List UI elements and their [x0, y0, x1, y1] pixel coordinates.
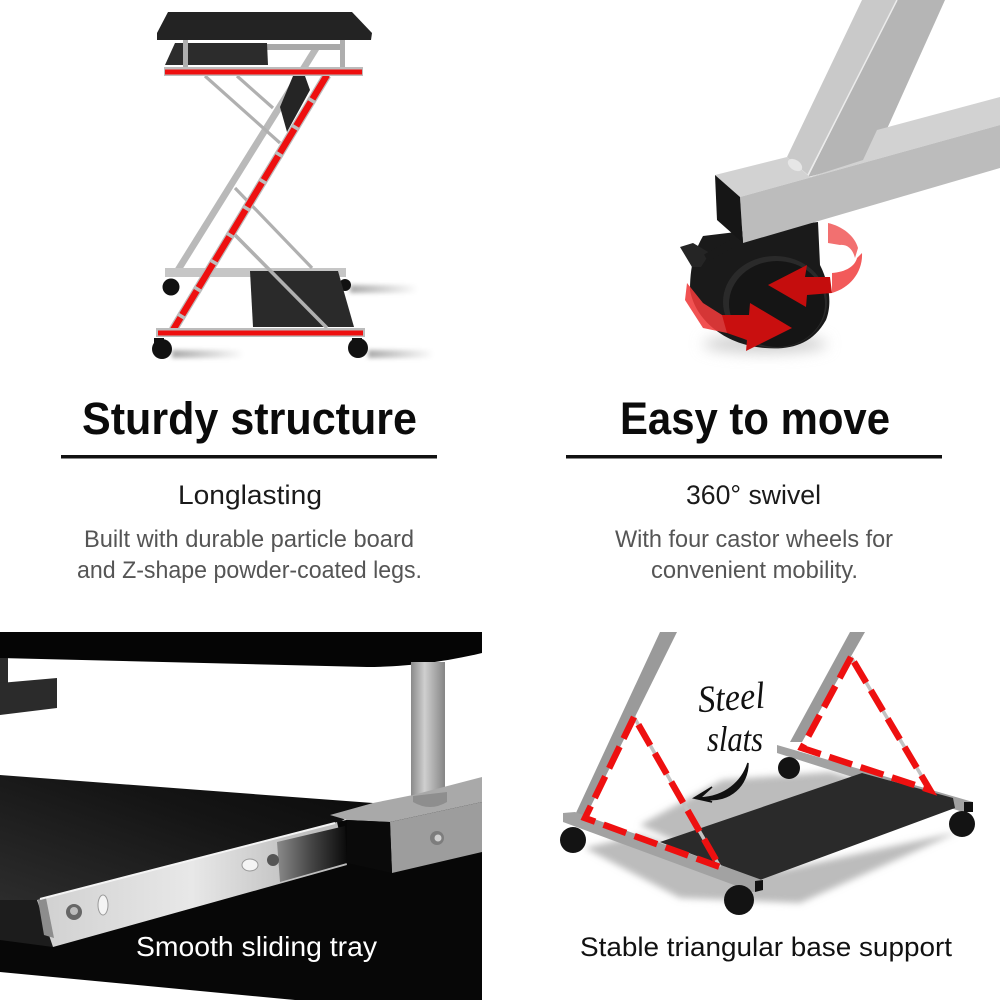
tray front edge — [0, 900, 53, 947]
slide rail — [37, 822, 347, 947]
arrow: to slats — [694, 763, 748, 802]
body text left — [77, 526, 422, 584]
wheel arrow upper — [768, 265, 832, 307]
casters — [560, 757, 975, 915]
panel: sliding tray — [0, 632, 482, 1000]
horizontal tube top — [715, 97, 1000, 197]
front bar — [563, 812, 763, 892]
front brace — [235, 235, 327, 328]
thin strut left — [634, 717, 720, 867]
panel: triangular base — [560, 632, 975, 962]
body text right: With four castor wheels for — [615, 526, 893, 553]
subheading: 360 swivel: 360° swivel — [686, 480, 821, 510]
tube end cap — [715, 175, 743, 243]
body text left: and Z-shape powder-coated legs. — [77, 557, 422, 584]
tray top surface — [0, 775, 373, 900]
weld mark — [786, 156, 804, 174]
red dashed triangle left — [585, 717, 720, 867]
tray posts — [183, 40, 345, 67]
body text left: Built with durable particle board — [84, 526, 414, 553]
rail end block — [38, 898, 54, 938]
floor shadows — [585, 772, 958, 903]
metal tube top — [330, 777, 482, 822]
wheel arrow lower — [685, 283, 792, 351]
back frame — [162, 44, 351, 296]
panel: caster wheel — [680, 0, 1000, 353]
shelf — [660, 773, 955, 880]
tube bolt — [430, 831, 444, 845]
caster body — [680, 222, 829, 348]
horizontal tube front — [740, 125, 1000, 243]
subheading: longlasting: Longlasting — [178, 480, 322, 510]
desktop — [157, 12, 372, 40]
panel: sturdy structure desk — [152, 12, 434, 359]
heading: sturdy structure: Sturdy structure — [82, 393, 417, 444]
keyboard tray — [165, 43, 268, 65]
floor shadows — [172, 285, 434, 358]
rail slot — [98, 895, 108, 915]
rail screw — [66, 904, 82, 920]
back bar end cap — [964, 802, 973, 812]
heading: easy to move: Easy to move — [620, 393, 890, 444]
support panel — [280, 76, 310, 132]
highlighted front leg — [173, 75, 327, 330]
post base — [413, 792, 447, 807]
thin strut right — [851, 657, 930, 790]
divider left — [61, 455, 437, 458]
tube end cap — [347, 820, 392, 873]
highlighted bottom bar — [156, 328, 365, 337]
base dark area — [0, 790, 482, 1000]
red dashed triangle right — [802, 657, 930, 790]
highlighted top bar — [164, 67, 363, 76]
front casters — [152, 338, 368, 359]
body text right: convenient mobility. — [651, 557, 858, 584]
rear arrow arc — [828, 223, 862, 293]
desktop underside — [0, 632, 482, 667]
handwritten label: slats: slats — [707, 719, 763, 759]
metal tube side — [390, 802, 482, 873]
post — [411, 662, 445, 807]
bottom shelf — [250, 271, 354, 327]
caption: sliding tray: Smooth sliding tray — [136, 931, 377, 962]
handwritten label: steel: Steel — [696, 675, 766, 721]
rail slot 2 — [242, 859, 258, 871]
caption: triangular base: Stable triangular base support — [580, 932, 953, 962]
thin braces — [205, 76, 312, 268]
metal leg — [787, 0, 945, 177]
rear bracket — [0, 658, 57, 715]
back bar — [777, 745, 973, 812]
legs — [575, 632, 865, 818]
rail top edge — [40, 823, 335, 899]
bar end cap right — [755, 880, 763, 892]
rail screw 2 — [267, 854, 279, 866]
divider right — [566, 455, 942, 458]
body text right — [615, 526, 893, 584]
rail inner recess — [277, 826, 347, 882]
wheel shadow — [703, 335, 827, 353]
